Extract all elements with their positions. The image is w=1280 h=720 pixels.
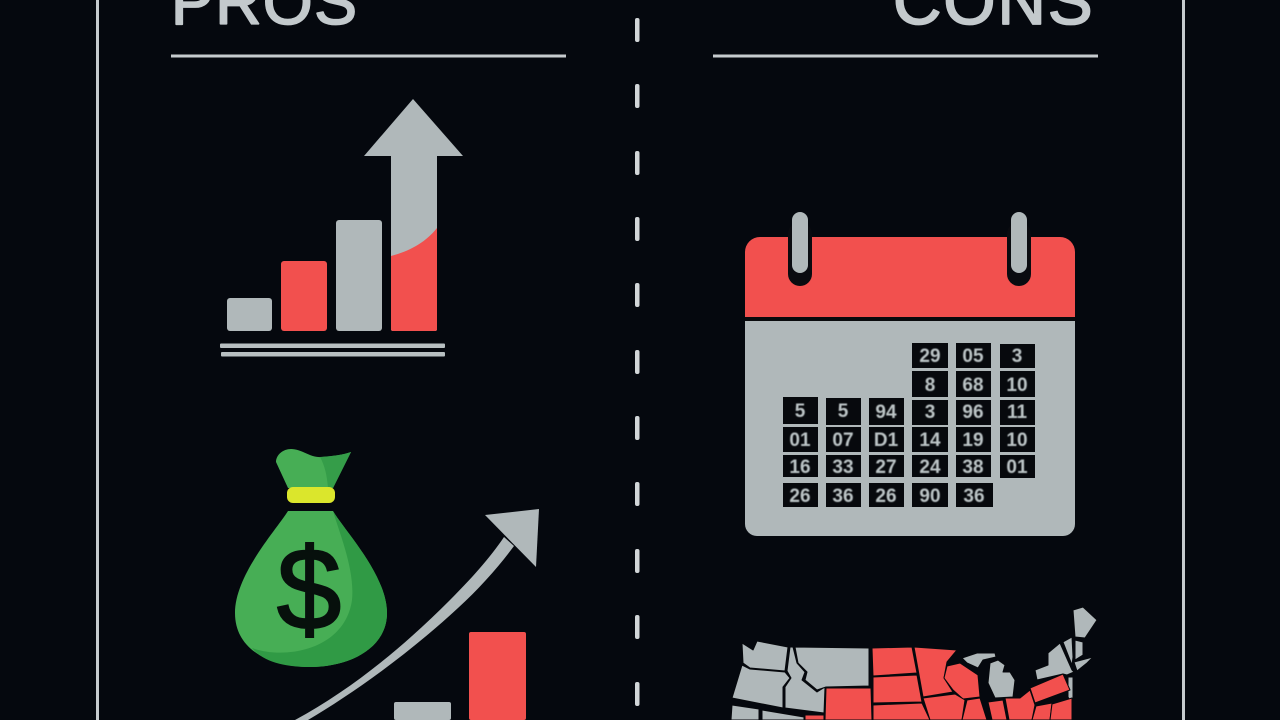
- icon: calendar: 3: [925, 402, 935, 423]
- icon: money bag: $: [277, 524, 341, 654]
- icon: calendar: 19: [962, 430, 984, 451]
- icon: calendar: 94: [875, 402, 897, 423]
- heading: pros: [171, 0, 566, 58]
- heading: cons: [713, 0, 1098, 58]
- icon: calendar: 01: [1006, 457, 1028, 478]
- icon: calendar: 10: [1006, 375, 1028, 396]
- icon: calendar: 36: [963, 486, 985, 507]
- icon: calendar: 33: [832, 457, 854, 478]
- icon: calendar: 24: [919, 457, 941, 478]
- icon: growth arrow with bars: [295, 509, 539, 720]
- icon: calendar: D1: [874, 430, 899, 451]
- icon: calendar: 01: [789, 430, 811, 451]
- icon: rising bar chart with arrow: [220, 99, 463, 356]
- icon: calendar: 26: [789, 486, 811, 507]
- map: united states: [731, 607, 1097, 720]
- icon: calendar: 10: [1006, 430, 1028, 451]
- icon: calendar: 68: [962, 375, 984, 396]
- icon: calendar: 16: [789, 457, 811, 478]
- icon: money bag: [235, 449, 387, 667]
- icon: calendar: 96: [962, 402, 984, 423]
- icon: calendar: 11: [1007, 402, 1027, 423]
- icon: calendar: 27: [875, 457, 897, 478]
- icon: calendar: 26: [875, 486, 897, 507]
- icon: calendar: 38: [962, 457, 984, 478]
- icon: calendar: 05: [962, 346, 984, 367]
- icon: calendar: 8: [925, 375, 935, 396]
- icon: calendar: 5: [838, 401, 849, 422]
- icon: calendar: 29: [919, 346, 941, 367]
- icon: calendar: 90: [919, 486, 941, 507]
- icon: calendar: 3: [1012, 346, 1022, 367]
- icon: calendar: [745, 212, 1075, 536]
- icon: calendar: 07: [832, 430, 854, 451]
- icon: calendar: 5: [795, 401, 806, 422]
- icon: calendar: 14: [919, 430, 941, 451]
- icon: calendar: 36: [832, 486, 854, 507]
